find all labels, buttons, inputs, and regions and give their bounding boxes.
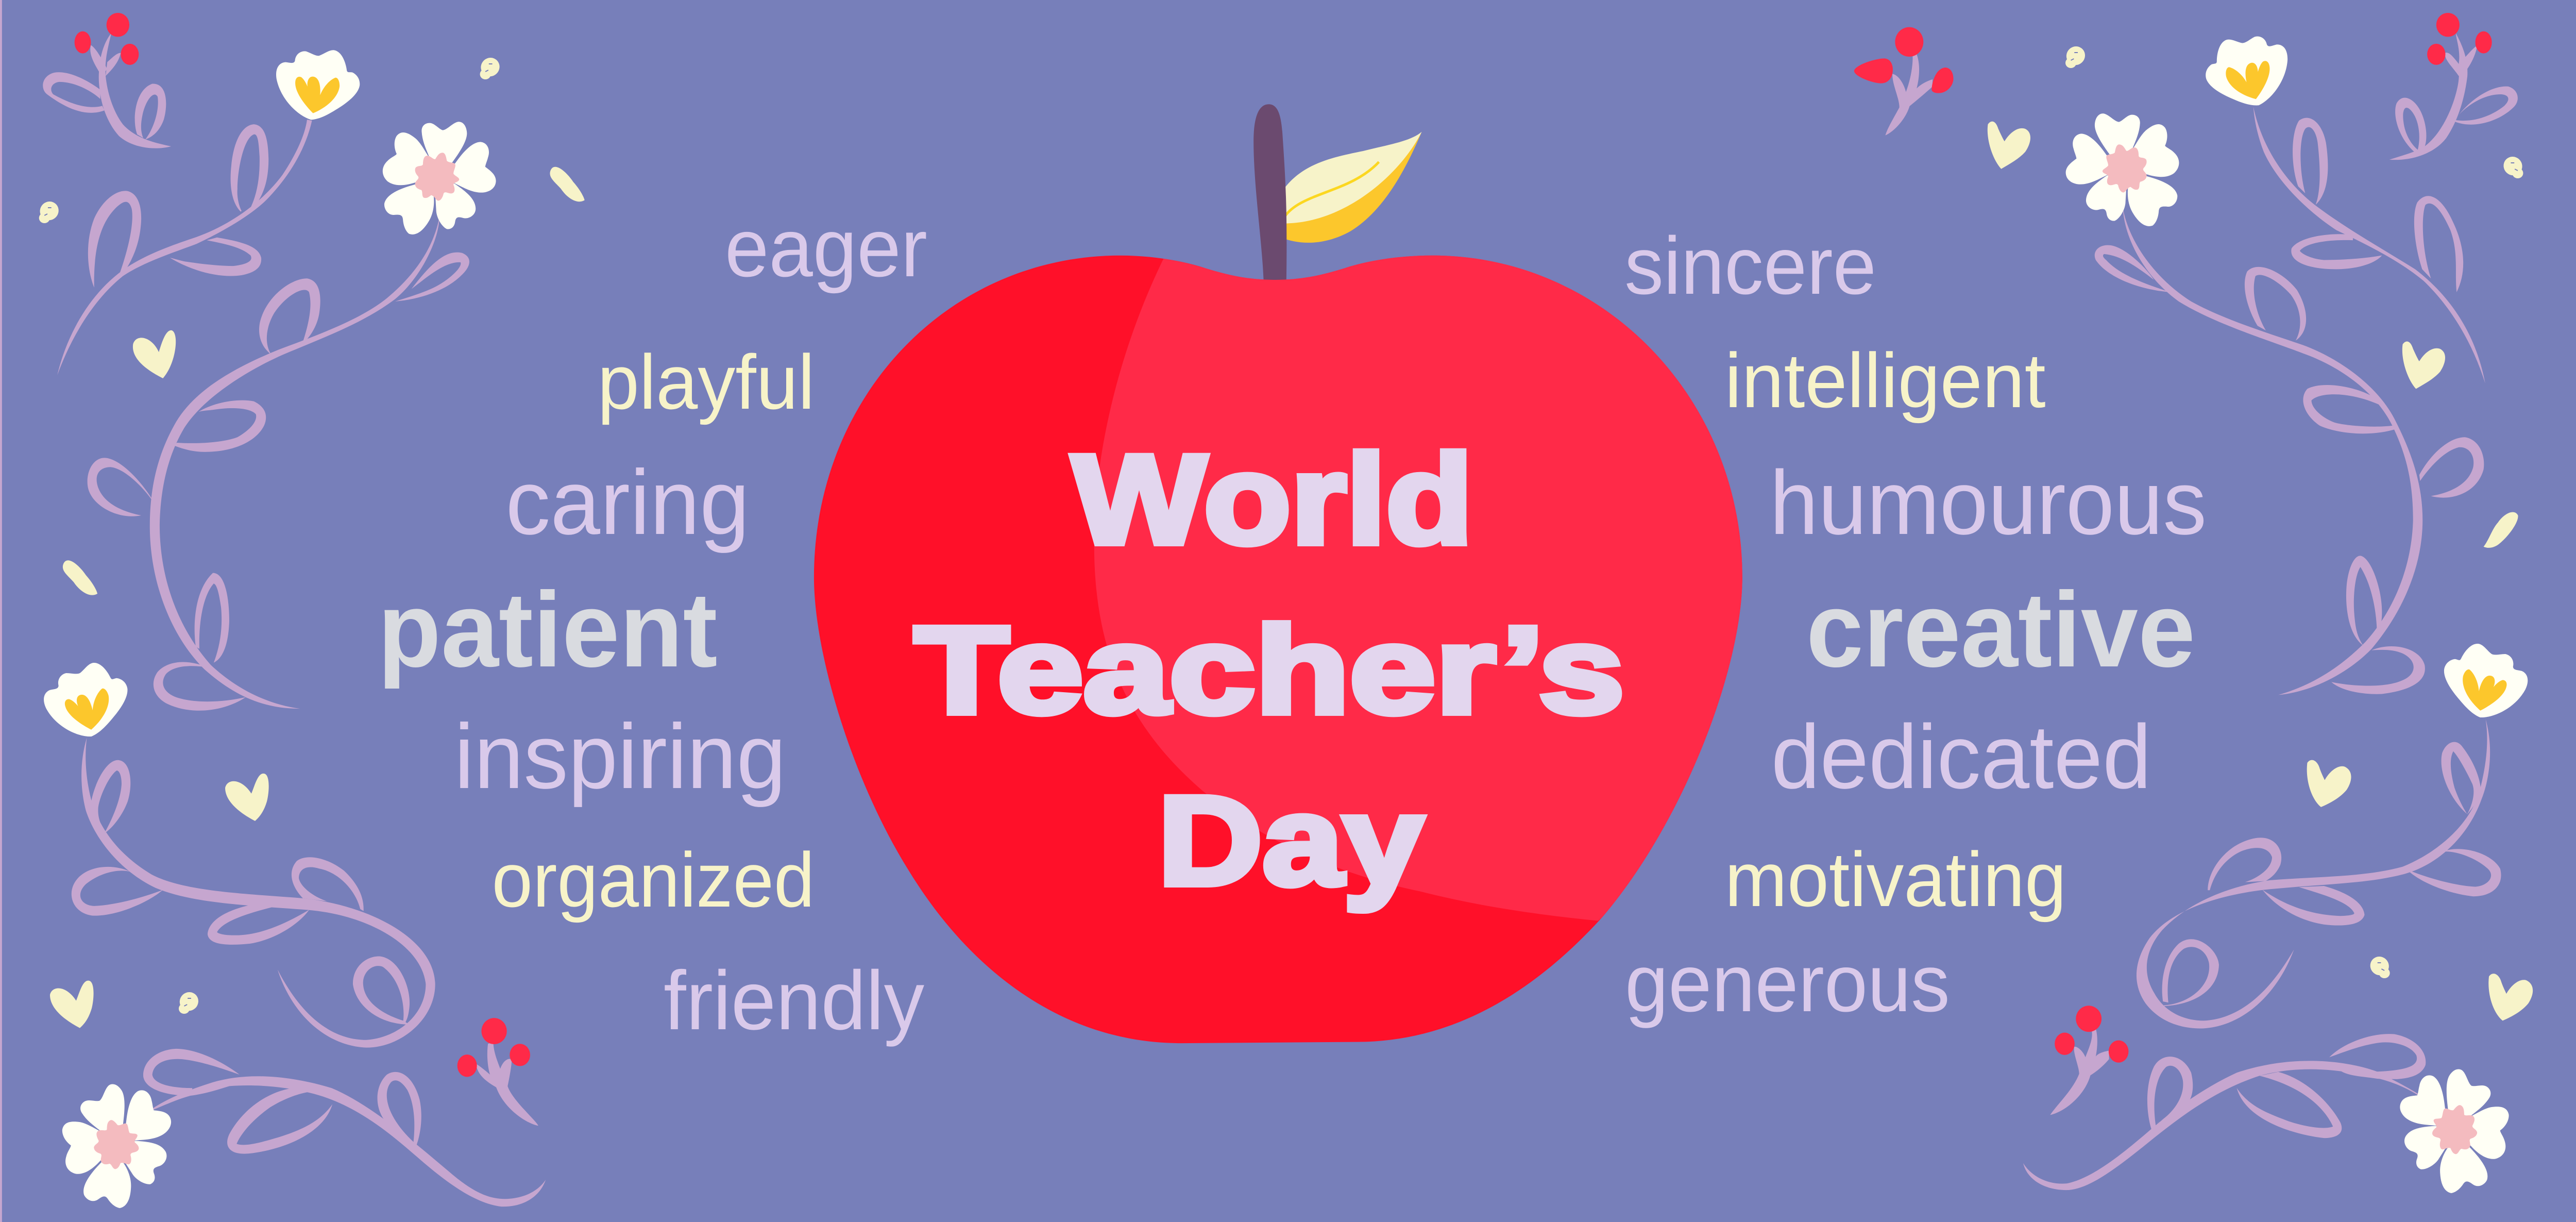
word: eager: eager <box>725 202 927 294</box>
dot <box>38 199 61 223</box>
dot <box>2064 44 2088 68</box>
word: creative: creative <box>1806 570 2195 689</box>
sprig with red berries <box>2050 1006 2128 1115</box>
dot <box>2501 154 2525 178</box>
floral decoration: top left <box>43 13 585 711</box>
sprig with red berries <box>457 1018 538 1126</box>
word: inspiring: inspiring <box>454 705 786 808</box>
heart <box>1988 122 2030 169</box>
flower: yellow tulip lower right <box>2434 635 2534 729</box>
dot <box>177 990 201 1014</box>
sprig with red berries <box>2389 13 2518 160</box>
flower: white daisy bottom left <box>43 1066 195 1222</box>
heart <box>225 774 269 821</box>
word: sincere: sincere <box>1624 220 1876 311</box>
heart <box>2307 760 2351 807</box>
word: intelligent: intelligent <box>1725 338 2046 424</box>
flower: yellow tulip top left <box>276 50 360 120</box>
flower: yellow tulip top right <box>2201 31 2293 112</box>
long vine from white flower <box>2095 207 2484 695</box>
flower: white daisy top right <box>2066 113 2179 226</box>
long vine from white flower <box>88 215 469 711</box>
heart <box>133 330 176 378</box>
leaf <box>1281 132 1422 243</box>
flower: yellow tulip lower left <box>38 655 138 748</box>
floral decoration: bottom left <box>50 738 546 1207</box>
word: humourous: humourous <box>1770 452 2207 554</box>
heart lower <box>50 981 94 1028</box>
curling vine <box>2137 719 2501 1028</box>
word: generous: generous <box>1625 938 1950 1029</box>
word list: right <box>1624 220 2207 1029</box>
flower: white daisy bottom right <box>2376 1051 2528 1208</box>
heart lower <box>2488 974 2533 1020</box>
sprig with red berries <box>43 13 171 148</box>
small cream dots <box>38 44 2525 1014</box>
floral decoration: bottom right <box>2023 719 2533 1190</box>
dot <box>478 55 502 79</box>
petal lower <box>63 560 97 595</box>
floral decoration: top right <box>1988 13 2518 695</box>
dot <box>2368 954 2392 978</box>
title <box>914 429 1624 912</box>
petal <box>2484 512 2518 548</box>
word: playful: playful <box>598 339 815 426</box>
apple illustration <box>814 104 1742 1043</box>
flower: white daisy top left <box>383 122 496 235</box>
apple highlight <box>1094 256 1742 921</box>
word: organized: organized <box>492 837 815 924</box>
petal <box>550 167 585 202</box>
stem <box>1253 104 1286 282</box>
vine to yellow flower <box>57 120 312 375</box>
word list: left <box>378 202 927 1047</box>
title line: Day: Day <box>1158 770 1423 912</box>
heart lower <box>2402 341 2445 389</box>
word: patient: patient <box>378 570 718 689</box>
word: caring: caring <box>505 451 750 554</box>
title line: World: World <box>1072 429 1473 571</box>
title line: Teacher's: Teacher’s <box>914 601 1624 739</box>
word: dedicated: dedicated <box>1771 706 2151 808</box>
curling vine <box>72 738 435 1048</box>
bottom vine <box>2023 1034 2426 1190</box>
bottom vine <box>143 1049 546 1207</box>
apple body <box>814 256 1742 1043</box>
word: friendly: friendly <box>664 953 925 1047</box>
sprig: top centre right <box>1854 27 1953 136</box>
word: motivating: motivating <box>1725 836 2066 923</box>
vine to yellow flower <box>2253 107 2485 383</box>
